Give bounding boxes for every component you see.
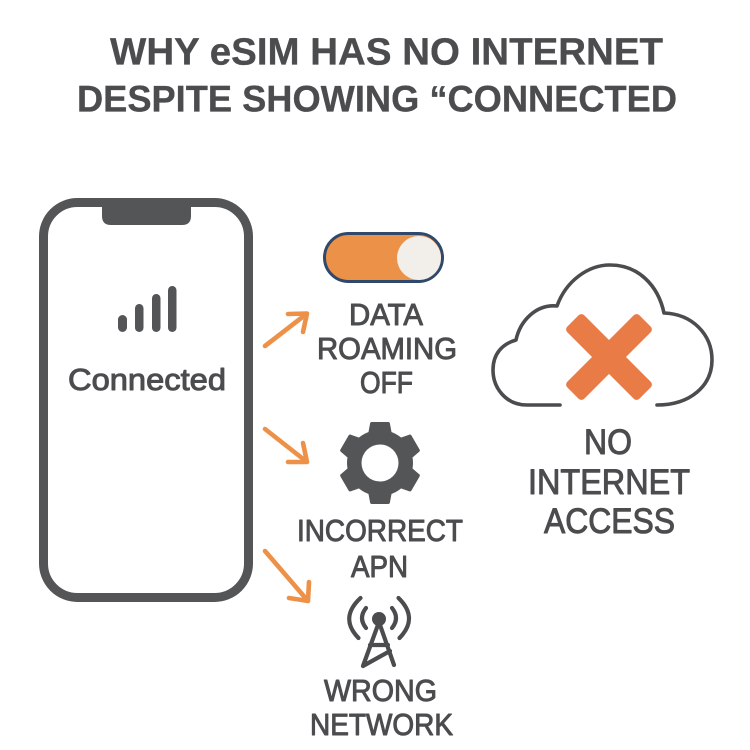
panel: incorrect APN [297,422,463,584]
arrow: phone to data roaming [265,314,307,346]
data roaming label: OFF [360,365,413,400]
incorrect APN label: APN [351,549,408,584]
data roaming label [317,297,457,400]
icon: gear [338,422,422,504]
icon: signal bars [118,286,176,332]
phone notch [102,200,191,225]
icon: cloud outline [493,265,712,405]
arrow: phone to incorrect APN [265,429,307,462]
panel: no internet access [493,265,712,541]
title: WHY eSIM HAS NO INTERNET [110,32,663,74]
icon: cell tower [349,598,409,666]
data roaming label: DATA [349,297,423,332]
no internet access label: INTERNET [528,463,690,502]
wrong network label: NETWORK [310,707,453,742]
title: DESPITE SHOWING “CONNECTED [77,78,677,120]
data roaming label: ROAMING [317,331,457,366]
no internet access label: ACCESS [544,502,675,541]
incorrect APN label [297,513,463,584]
icon: toggle switch [324,234,442,282]
panel: data roaming off [317,234,457,400]
panel: wrong network [310,598,453,742]
incorrect APN label: INCORRECT [297,513,463,548]
title [77,32,677,120]
phone body [44,202,248,598]
no internet access label [528,423,690,541]
panel: phone [44,200,248,598]
wrong network label: WRONG [324,673,437,708]
no internet access label: NO [584,423,632,462]
arrow: phone to wrong network [265,551,309,601]
icon: red cross [564,312,654,402]
wrong network label [310,673,453,742]
connected label: Connected [68,362,226,397]
